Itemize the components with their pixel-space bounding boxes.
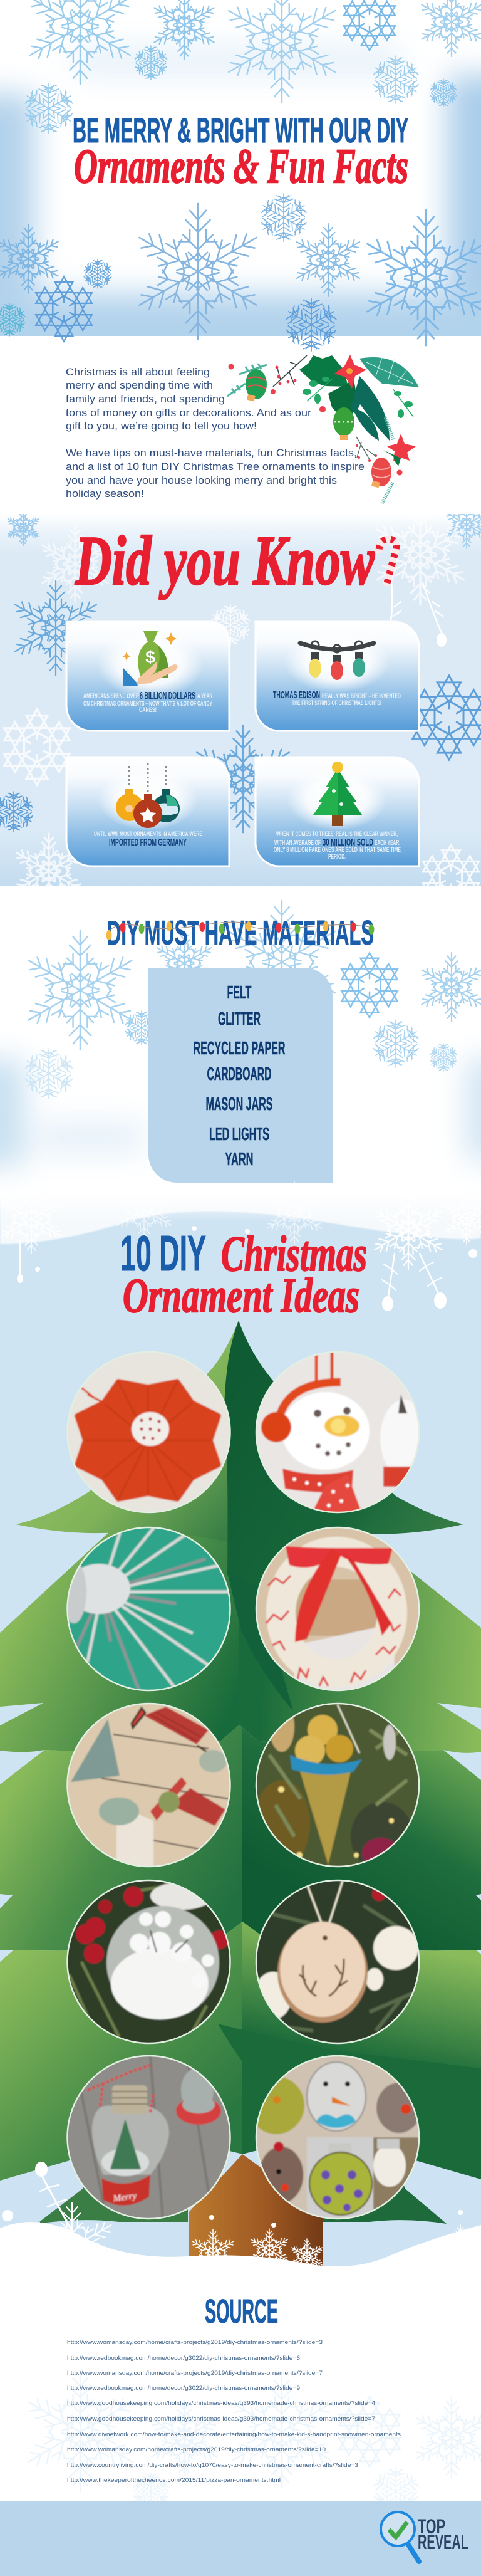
faded snowflakes: [20, 2372, 481, 2515]
photo: popsicle stick sleds: [63, 1699, 235, 1871]
panel: header: [0, 0, 481, 375]
logo: top reveal: TOP: [418, 2515, 445, 2538]
fact text: CANES!: [139, 706, 157, 714]
photo: yarn star ornament: [63, 1348, 235, 1517]
heading: Christmas: Christmas: [221, 1227, 367, 1282]
snow ground: [0, 2162, 481, 2293]
photo: snowman handprint globe: [63, 1877, 235, 2046]
source links: http://www.womansday.com/home/crafts-projects/g2019/diy-christmas-ornaments/?slide=10: [67, 2446, 326, 2453]
photo: embroidery hoop ornaments: [248, 2053, 426, 2222]
top frost garland: [0, 1178, 481, 1301]
fact text: REALLY WAS BRIGHT – HE INVENTED: [322, 693, 401, 700]
fact text: [83, 691, 212, 714]
section background: [0, 514, 481, 886]
material items: GLITTER: [218, 1009, 261, 1029]
heading: Ornament Ideas: Ornament Ideas: [123, 1268, 359, 1322]
heading: source: SOURCE: [205, 2293, 278, 2330]
illustration: christmas tree: [0, 1321, 481, 2281]
background snowflakes: [0, 501, 481, 910]
intro text: and a list of 10 fun DIY Christmas Tree ornaments to inspire: [66, 461, 365, 473]
fact text: EACH YEAR.: [375, 839, 400, 847]
panel: did you know: [0, 501, 481, 910]
source links: [67, 2339, 401, 2484]
intro text: [66, 366, 365, 500]
source links: http://www.diynetwork.com/how-to/make-and-decorate/entertaining/how-to-make-kid-s-handprint-snowmen-ornaments: [67, 2431, 401, 2438]
logo: top reveal: [381, 2512, 468, 2562]
photo: gold paper cone: [256, 1702, 420, 1868]
card: thomas edison: [256, 622, 419, 731]
photo: ribbon wreath: [256, 1527, 420, 1691]
fact text: WITH AN AVERAGE OF: [274, 839, 321, 847]
panel: footer: [0, 2501, 481, 2576]
fact text: IMPORTED FROM GERMANY: [109, 837, 187, 848]
source links: http://www.womansday.com/home/crafts-projects/g2019/diy-christmas-ornaments/?slide=3: [67, 2339, 323, 2346]
soft blue haze: [0, 1059, 481, 1166]
material items: RECYCLED PAPER: [193, 1039, 286, 1059]
source links: http://www.thekeeperofthecheerios.com/2015/11/pizza-pan-ornaments.html: [67, 2477, 281, 2484]
garland beads: [17, 1226, 477, 1311]
material items: [193, 983, 286, 1170]
footer band: [0, 2501, 481, 2576]
panel: materials: [0, 901, 481, 1183]
source links: http://www.goodhousekeeping.com/holidays/christmas-ideas/g393/homemade-christmas-ornaments/?slide=7: [67, 2416, 375, 2422]
snow flakes: [27, 2175, 481, 2293]
icon: string of lights: [300, 641, 374, 680]
icon: money bag in hand: [122, 631, 178, 686]
material items: MASON JARS: [205, 1094, 273, 1114]
string of lights over heading: [106, 921, 375, 940]
source links: http://www.countryliving.com/diy-crafts/how-to/g1070/easy-to-make-christmas-ornament-crafts/?slide=3: [67, 2462, 358, 2469]
fact text: 6 BILLION DOLLARS: [140, 691, 195, 701]
icon: money bag in hand: $: [145, 647, 155, 667]
fact text: [274, 830, 401, 861]
fact text: PERIOD.: [328, 853, 346, 861]
intro text: holiday season!: [66, 488, 144, 500]
source links: http://www.redbookmag.com/home/decor/g3022/diy-christmas-ornaments/?slide=9: [67, 2385, 300, 2392]
material items: FELT: [227, 983, 252, 1003]
fact text: 30 MILLION SOLD: [323, 837, 373, 848]
source links: http://www.redbookmag.com/home/decor/g3022/diy-christmas-ornaments/?slide=6: [67, 2355, 300, 2362]
fact text: AMERICANS SPEND OVER: [83, 693, 139, 700]
materials snowflakes: [20, 901, 481, 1099]
heading: 10 DIY: 10 DIY: [120, 1225, 206, 1281]
panel: ornament ideas: [0, 1178, 481, 2293]
fact text: A YEAR: [197, 693, 212, 700]
card: six billion dollars: [66, 622, 229, 731]
intro text: you and have your house looking merry and bright this: [66, 474, 337, 486]
photo: light bulb snow globe: Merry: [112, 2191, 137, 2204]
icon: candy cane: [379, 539, 396, 583]
icon: hanging baubles: [116, 763, 180, 828]
tree trunk: [189, 2154, 323, 2281]
source links: http://www.womansday.com/home/crafts-projects/g2019/diy-christmas-ornaments/?slide=7: [67, 2370, 323, 2377]
card: imported from germany: [66, 757, 229, 866]
intro text: tons of money on gifts or decorations. And as our: [66, 407, 311, 419]
material items: YARN: [225, 1149, 253, 1170]
fact text: THE FIRST STRING OF CHRISTMAS LIGHTS!: [292, 699, 381, 707]
snow beads: [2, 2162, 463, 2228]
intro text: gift to you, we’re going to tell you how!: [66, 420, 257, 432]
fact text: ON CHRISTMAS ORNAMENTS – NOW THAT’S A LOT OF CANDY: [83, 700, 212, 708]
intro text: family and friends, not spending: [66, 393, 225, 405]
photo: light bulb snow globe: [63, 2053, 235, 2222]
photo: snowman tea light: [256, 1351, 420, 1513]
header snowflakes: [0, 0, 481, 351]
panel: sources: [20, 2293, 481, 2515]
intro text: We have tips on must-have materials, fun Christmas facts,: [66, 447, 357, 459]
icon: christmas tree: [313, 762, 362, 826]
fact text: ONLY 8 MILLION FAKE ONES ARE SOLD IN THAT SAME TIME: [274, 846, 401, 854]
heading: did you know: Did you Know: [75, 522, 375, 600]
panel: intro: [66, 355, 419, 503]
card: thirty million sold: [256, 757, 419, 866]
fact text: THOMAS EDISON: [273, 690, 320, 701]
photo: glitter star on teal: [61, 1523, 235, 1695]
material items: LED LIGHTS: [209, 1124, 269, 1144]
fact text: [94, 830, 202, 848]
materials list panel: [148, 968, 333, 1183]
header background: [0, 47, 481, 375]
photo: wood slice reindeer: [251, 1877, 423, 2046]
fact text: [273, 690, 401, 707]
fact text: UNTIL WWII MOST ORNAMENTS IN AMERICA WERE: [94, 830, 202, 838]
icon: holly and ornament decoration: [227, 355, 419, 503]
section background: [0, 1194, 481, 2281]
intro text: Christmas is all about feeling: [66, 366, 210, 378]
material items: CARDBOARD: [207, 1064, 272, 1084]
source links: http://www.goodhousekeeping.com/holidays/christmas-ideas/g393/homemade-christmas-ornaments/?slide=4: [67, 2400, 375, 2407]
fact text: WHEN IT COMES TO TREES, REAL IS THE CLEAR WINNER,: [276, 830, 398, 838]
intro text: merry and spending time with: [66, 379, 213, 391]
